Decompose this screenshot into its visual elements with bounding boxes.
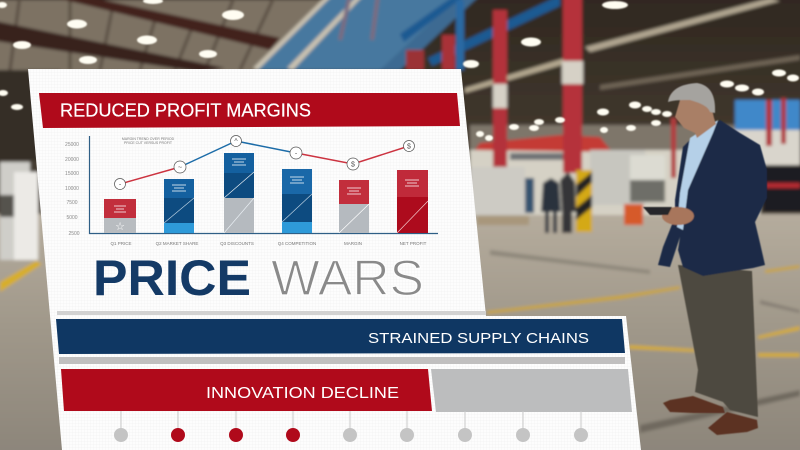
x axis labels: Q1 PRICE: [110, 241, 132, 246]
bar 1: [104, 199, 136, 233]
bar: innovation decline: INNOVATION DECLINE: [206, 385, 399, 402]
ceiling lights: [0, 0, 799, 141]
header banner: reduced profit margins: [39, 93, 460, 128]
y axis labels: 7500: [66, 200, 78, 206]
infographic board: [28, 69, 641, 450]
bar 2: [164, 179, 194, 233]
bar: strained supply chains: STRAINED SUPPLY CHAINS: [368, 331, 589, 347]
grey separator bar: [59, 357, 625, 364]
trousers: [678, 265, 758, 417]
marker glyphs: $: [407, 144, 411, 150]
axes: [90, 136, 438, 234]
y axis labels: 15000: [65, 171, 79, 177]
shoes: [663, 396, 758, 435]
y axis labels: 10000: [65, 186, 79, 192]
main title: price wars: PRICE: [93, 250, 251, 306]
x axis labels: [110, 241, 427, 246]
trend markers: [114, 136, 414, 190]
x axis labels: MARGIN: [344, 241, 362, 246]
bar: innovation decline: [61, 369, 432, 411]
bar 6: [397, 170, 428, 233]
bar and line chart: [65, 136, 438, 246]
lower panel backdrop: [57, 311, 486, 315]
trend line: [120, 141, 409, 184]
bar 4: [282, 169, 312, 233]
hair: [668, 83, 715, 113]
chart caption: PRICE CUT VERSUS PROFIT: [124, 141, 173, 145]
x axis labels: Q2 MARKET SHARE: [156, 241, 198, 246]
y axis labels: 20000: [65, 157, 79, 163]
bar 3: [224, 153, 254, 233]
marker glyphs: -: [119, 182, 122, 188]
chart caption: [122, 137, 175, 145]
grey empty bar: [431, 369, 632, 412]
x axis labels: NET PROFIT: [400, 241, 427, 246]
marker glyphs: ^: [234, 138, 238, 146]
bar 5: [339, 180, 369, 233]
bar: strained supply chains: [56, 319, 625, 354]
marker glyphs: $: [351, 162, 355, 168]
y axis labels: 25000: [65, 142, 79, 148]
hands: [662, 207, 694, 225]
man with tablet: [643, 83, 767, 435]
timeline dots: [114, 411, 588, 442]
bar 1: ☆: [115, 221, 125, 233]
marker glyphs: -: [295, 150, 298, 158]
neck and face: [675, 100, 716, 138]
y axis labels: 2500: [68, 231, 80, 237]
tablet: [643, 207, 672, 215]
shirt: [677, 120, 718, 230]
main title: price wars: [93, 250, 424, 306]
marker glyphs: ~: [178, 164, 182, 172]
x axis labels: Q3 DISCOUNTS: [220, 241, 254, 246]
y axis labels: [65, 142, 80, 237]
chart caption: MARGIN TREND OVER PERIOD: [122, 137, 175, 141]
main title: price wars: WARS: [271, 250, 424, 306]
y axis labels: 5000: [66, 215, 78, 221]
marker glyphs: [119, 138, 411, 188]
x axis labels: Q4 COMPETITION: [278, 241, 316, 246]
header banner: reduced profit margins: REDUCED PROFIT MARGINS: [60, 100, 311, 120]
blazer: [658, 120, 767, 276]
